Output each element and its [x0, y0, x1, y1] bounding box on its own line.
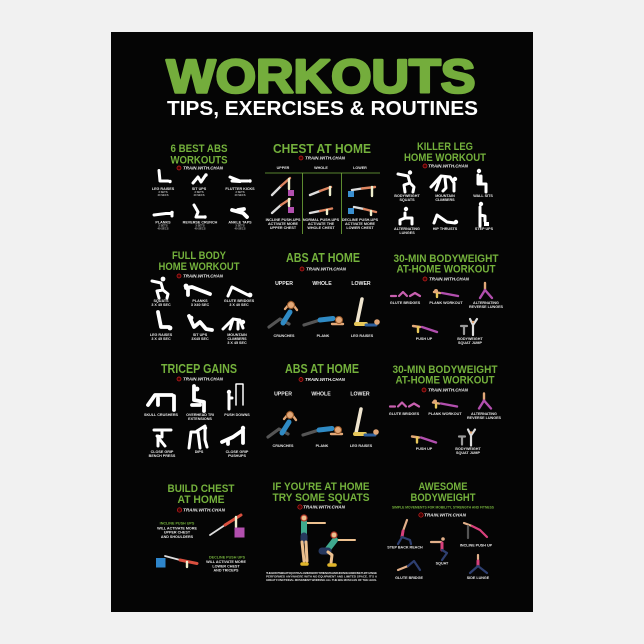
icon: mountain climbers	[223, 319, 245, 329]
callout: incline push ups: INCLINE PUSH UPS	[160, 522, 195, 526]
exercise labels: PLANK	[317, 334, 330, 338]
exercise labels: BENCH PRESS	[149, 454, 176, 458]
heading	[404, 141, 486, 164]
column captions: ACTIVATE MORE	[345, 222, 376, 226]
icon: squats	[152, 277, 168, 298]
title: WORKOUTS	[166, 50, 476, 102]
column headers: WHOLE	[312, 281, 332, 287]
column captions: UPPER CHEST	[270, 226, 297, 230]
column headers: LOWER	[350, 392, 370, 398]
exercise labels: CLIMBERS	[227, 337, 247, 341]
panel: 30-min bodyweight (second)	[389, 364, 502, 455]
exercise labels: 3 SETS	[158, 190, 168, 194]
handle: TRAIN.WITH.CHAN	[183, 377, 224, 382]
poster background	[111, 32, 533, 612]
heading: ABS AT HOME	[286, 251, 360, 265]
callout: incline push ups: AND SHOULDERS	[161, 535, 194, 539]
icon: wall sits	[477, 169, 486, 192]
column captions: WHOLE CHEST	[307, 226, 335, 230]
exercise labels	[152, 187, 255, 230]
heading: 30-MIN BODYWEIGHT	[392, 364, 498, 376]
exercise labels: INCLINE PUSH UP	[460, 544, 493, 548]
panel: chest at home	[265, 141, 380, 234]
exercise labels: 40 SECS	[234, 226, 246, 230]
icon: sit ups	[189, 316, 212, 330]
icon: glute bridges	[228, 287, 252, 297]
heading	[170, 143, 228, 166]
heading: CHEST AT HOME	[273, 141, 371, 156]
exercise labels: GLUTE BRIDGES	[389, 412, 420, 416]
exercise labels: SIT UPS	[192, 187, 207, 191]
body text: GREAT FUNCTIONAL MOVEMENT WORKING ALL THE BIG MUSCLES OF THE LEGS.	[266, 578, 377, 582]
illustration: side lunge	[470, 555, 487, 573]
heading: BUILD CHEST	[168, 483, 235, 495]
exercise labels: PLANK	[316, 444, 329, 448]
icon: incline push-up top	[272, 178, 294, 196]
illustration: standing woman	[301, 515, 325, 564]
column headers: UPPER	[275, 281, 293, 287]
callout: decline push ups: WILL ACTIVATE MORE	[206, 560, 246, 564]
heading	[394, 253, 499, 276]
exercise labels: SQUAT JUMP	[456, 451, 480, 455]
icon: alternating lunges	[400, 207, 412, 224]
exercise labels: 3 X 40 SEC	[229, 303, 249, 307]
exercise labels: FLUTTER KICKS	[225, 187, 255, 191]
exercise labels: HIP THRUSTS	[433, 227, 458, 231]
exercise labels: PLANK WORKOUT	[429, 301, 463, 305]
exercise labels: SIDE LUNGE	[467, 576, 490, 580]
exercise labels: SQUAT JUMP	[458, 341, 482, 345]
column headers: UPPER	[277, 166, 290, 170]
exercise labels: 40 SECS	[157, 226, 169, 230]
callout: incline push ups	[157, 522, 197, 539]
exercise labels: EXTENSIONS	[188, 417, 212, 421]
icon: leg raises	[159, 170, 172, 183]
handle: TRAIN.WITH.CHAN	[305, 156, 346, 161]
exercise labels: OVERHEAD TRI	[186, 413, 214, 417]
icon: overhead tri extensions	[192, 386, 204, 411]
callout: decline push ups: LOWER CHEST	[212, 564, 240, 568]
exercise labels: PLANK WORKOUT	[428, 412, 462, 416]
column captions: INCLINE PUSH-UPS	[266, 218, 301, 222]
exercise labels: ANKLE TAPS	[228, 220, 252, 224]
icon: close grip pushups	[222, 426, 245, 444]
illustration: squat jump	[459, 430, 475, 446]
icon: push downs	[227, 384, 243, 409]
illustration: incline push up	[210, 515, 244, 538]
exercise labels: PLANKS	[192, 299, 208, 303]
illustration: alternating reverse lunges	[480, 283, 492, 298]
icon: incline push-up bottom	[272, 199, 294, 213]
panel: abs at home (second)	[268, 362, 379, 448]
column headers: LOWER	[351, 281, 371, 287]
callout: incline push ups: UPPER CHEST	[164, 530, 191, 534]
exercise labels: PUSH UP	[416, 447, 433, 451]
exercise labels	[150, 299, 255, 345]
subtitle: TIPS, EXERCISES & ROUTINES	[167, 97, 478, 120]
illustration: plank workout	[434, 289, 458, 297]
callout: incline push ups: WILL ACTIVATE MORE	[157, 526, 197, 530]
illustration: crunches	[269, 302, 297, 327]
tagline: SIMPLE MOVEMENTS FOR MOBILITY, STRENGTH AND FITNESS	[392, 506, 495, 510]
callout: decline push ups: DECLINE PUSH UPS	[209, 556, 246, 560]
heading	[392, 364, 498, 386]
exercise labels: 40 SECS	[193, 193, 205, 197]
column captions: ACTIVATE MORE	[268, 222, 299, 226]
illustration: leg raises	[355, 409, 379, 435]
illustration: step back reach	[398, 520, 411, 544]
icon: close grip bench press	[154, 430, 171, 446]
exercise labels: SQUATS	[399, 198, 415, 202]
handle: TRAIN.WITH.CHAN	[428, 388, 469, 393]
exercise labels: BODYWEIGHT	[455, 447, 481, 451]
exercise labels: 3 X 45 SEC	[151, 337, 171, 341]
icon: normal push-up bottom	[310, 208, 332, 214]
exercise labels	[274, 334, 374, 338]
exercise labels: ALTERNATING	[394, 227, 420, 231]
icon: hip thrusts	[434, 215, 458, 224]
heading: AWESOME	[418, 481, 468, 493]
exercise labels: LEG RAISES	[152, 187, 175, 191]
column captions: ACTIVATE THE	[308, 222, 335, 226]
exercise labels: 3 X40 SEC	[191, 303, 209, 307]
heading: TRICEP GAINS	[161, 362, 237, 376]
handle: TRAIN.WITH.CHAN	[429, 277, 470, 282]
icon: ankle taps	[232, 209, 247, 217]
exercise labels: 40 SECS	[194, 226, 206, 230]
exercise labels: GLUTE BRIDGE	[395, 576, 423, 580]
handle: TRAIN.WITH.CHAN	[183, 166, 224, 171]
icon: decline push-up bottom	[348, 207, 376, 215]
heading: 30-MIN BODYWEIGHT	[394, 253, 499, 265]
exercise labels: 40 SECS	[157, 193, 169, 197]
exercise labels: DIPS	[195, 450, 204, 454]
heading	[410, 481, 476, 504]
illustration: plank	[304, 316, 343, 325]
exercise labels: REVERSE LUNGES	[467, 416, 502, 420]
heading: AT-HOME WORKOUT	[396, 264, 496, 276]
icon: mountain climbers	[431, 176, 457, 191]
heading	[158, 250, 240, 273]
illustration: incline push up	[464, 523, 487, 538]
exercise labels: REVERSE CRUNCH	[183, 220, 218, 224]
exercise labels: 3 X 45 SEC	[151, 303, 171, 307]
icon: skull crushers	[148, 395, 174, 410]
exercise labels	[144, 413, 250, 458]
heading: AT-HOME WORKOUT	[396, 374, 495, 386]
exercise labels: 40 SECS	[234, 193, 246, 197]
panel: 30-min bodyweight (first)	[390, 253, 504, 345]
illustration: glute bridges	[391, 292, 420, 296]
exercise labels: 3 SETS	[195, 223, 205, 227]
body text: PERFORMED ANYWHERE WITH NO EQUIPMENT AND LIMITED SPACE. IT'S A	[266, 574, 378, 578]
illustration: squat	[431, 537, 447, 560]
exercise labels: WALL SITS	[473, 194, 493, 198]
heading: WORKOUTS	[170, 154, 228, 166]
heading: BODYWEIGHT	[410, 492, 476, 504]
heading	[168, 483, 235, 506]
column headers: UPPER	[274, 392, 292, 398]
exercise labels: SIT UPS	[193, 333, 208, 337]
icon: sit ups	[193, 173, 208, 183]
icon: planks	[184, 284, 210, 295]
icon: decline push-up top	[348, 187, 375, 197]
illustration: push up	[412, 436, 436, 442]
column headers: WHOLE	[311, 392, 331, 398]
icon: flutter kicks	[230, 177, 252, 183]
column captions: LOWER CHEST	[346, 226, 374, 230]
exercise labels: CLIMBERS	[435, 198, 455, 202]
panel: 6 best abs workouts	[152, 143, 255, 230]
exercise labels: BODYWEIGHT	[457, 337, 483, 341]
exercise labels: PUSHUPS	[228, 454, 246, 458]
column headers	[274, 392, 370, 398]
exercise labels	[390, 301, 504, 345]
panel: killer leg home workout	[394, 141, 494, 235]
illustration: squat jump	[461, 319, 477, 335]
body text	[266, 571, 378, 582]
exercise labels: SQUATS	[153, 299, 169, 303]
exercise labels	[389, 412, 502, 455]
handle: TRAIN.WITH.CHAN	[303, 505, 346, 510]
callout: decline push ups: AND TRICEPS	[214, 568, 239, 572]
heading: HOME WORKOUT	[404, 152, 486, 164]
panel: tricep gains	[144, 362, 250, 458]
illustration: plank workout	[433, 400, 457, 408]
illustration: crunches	[268, 412, 296, 437]
handle: TRAIN.WITH.CHAN	[306, 267, 347, 272]
column headers	[275, 281, 371, 287]
exercise labels: CLOSE GRIP	[226, 450, 249, 454]
illustration: alternating reverse lunges	[479, 394, 491, 408]
exercise labels: REVERSE LUNGES	[469, 305, 504, 309]
column captions	[266, 218, 379, 230]
handle: TRAIN.WITH.CHAN	[428, 164, 469, 169]
illustration: glute bridges	[390, 402, 419, 406]
heading	[272, 481, 370, 504]
exercise labels: STEP BACK REACH	[387, 546, 423, 550]
column captions: DECLINE PUSH-UPS	[342, 218, 379, 222]
illustration: glute bridge	[398, 561, 420, 570]
panel: build chest at home	[156, 483, 246, 572]
illustration: push up	[413, 326, 437, 332]
callout: decline push ups	[206, 556, 246, 572]
handle: TRAIN.WITH.CHAN	[424, 513, 467, 518]
illustration: plank	[303, 426, 342, 435]
exercise labels: MOUNTAIN	[435, 194, 455, 198]
illustration: decline push up	[156, 556, 197, 568]
panel: if you're at home try some squats	[266, 481, 378, 582]
exercise labels: ALTERNATING	[471, 412, 497, 416]
icon: normal push-up top	[310, 187, 331, 195]
panel: abs at home (first)	[269, 251, 380, 338]
exercise labels: LEG RAISES	[350, 444, 373, 448]
exercise labels: 3 SETS	[235, 223, 245, 227]
exercise labels: LUNGES	[399, 231, 415, 235]
handle: TRAIN.WITH.CHAN	[183, 274, 224, 279]
icon: planks	[154, 211, 174, 216]
panel: full body home workout	[150, 250, 255, 345]
heading: 6 BEST ABS	[170, 143, 228, 155]
exercise labels: LEG RAISES	[150, 333, 173, 337]
heading: HOME WORKOUT	[158, 261, 240, 273]
exercise labels: ALTERNATING	[473, 301, 499, 305]
exercise labels: SQUAT	[436, 562, 449, 566]
exercise labels	[394, 194, 494, 235]
exercise labels: GLUTE BRIDGES	[390, 301, 421, 305]
icon: reverse crunch	[194, 205, 207, 219]
icon: leg raises	[158, 312, 172, 330]
exercise labels: PUSH UP	[416, 337, 433, 341]
exercise labels: GLUTE BRIDGES	[224, 299, 255, 303]
exercise labels: 3 X 45 SEC	[227, 341, 247, 345]
handle: TRAIN.WITH.CHAN	[183, 508, 226, 513]
exercise labels: CRUNCHES	[274, 334, 295, 338]
exercise labels: PUSH DOWNS	[224, 413, 250, 417]
exercise labels: MOUNTAIN	[227, 333, 247, 337]
exercise labels: CLOSE GRIP	[151, 450, 174, 454]
column headers: WHOLE	[314, 166, 328, 170]
exercise labels: SKULL CRUSHERS	[144, 413, 179, 417]
icon: step ups	[479, 202, 489, 226]
exercise labels	[273, 444, 373, 448]
panel: awesome bodyweight	[387, 481, 495, 580]
heading: ABS AT HOME	[285, 362, 359, 376]
heading: KILLER LEG	[417, 141, 473, 153]
illustration: squatting woman	[322, 532, 355, 565]
exercise labels	[387, 544, 493, 580]
exercise labels: 3 SETS	[194, 190, 204, 194]
column headers	[277, 166, 367, 170]
exercise labels: PLANKS	[155, 220, 171, 224]
exercise labels: STEP UPS	[475, 227, 494, 231]
exercise labels: BODYWEIGHT	[394, 194, 420, 198]
illustration: leg raises	[356, 299, 380, 325]
handle: TRAIN.WITH.CHAN	[305, 377, 346, 382]
exercise labels: 3 SETS	[235, 190, 245, 194]
exercise labels: 3 SETS	[158, 223, 168, 227]
heading: AT HOME	[178, 494, 224, 506]
exercise labels: CRUNCHES	[273, 444, 294, 448]
column headers: LOWER	[353, 166, 367, 170]
body text: THE BODYWEIGHT SQUAT IS A LOWER BODY STRENGTH-ENDURANCE EXERCISE THAT CAN BE	[266, 571, 377, 575]
exercise labels: 3X45 SEC	[191, 337, 209, 341]
heading: FULL BODY	[172, 250, 227, 262]
heading: IF YOU'RE AT HOME	[272, 481, 370, 493]
icon: bodyweight squats	[398, 170, 414, 192]
exercise labels: LEG RAISES	[351, 334, 374, 338]
icon: dips	[189, 426, 207, 448]
column captions: NORMAL PUSH-UPS	[303, 218, 340, 222]
heading: TRY SOME SQUATS	[272, 492, 370, 504]
